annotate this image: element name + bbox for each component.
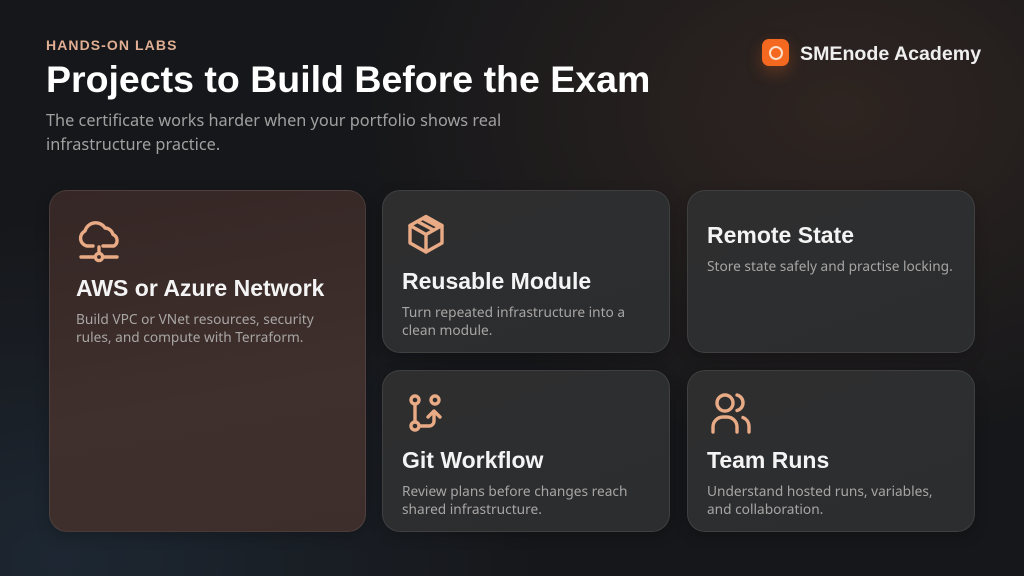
subtitle: The certificate works harder when your portfolio shows real [46, 109, 501, 131]
panel: Team Runs [687, 370, 975, 532]
description: shared infrastructure. [402, 500, 542, 519]
icon: git branch [409, 394, 442, 432]
description [402, 482, 627, 519]
panel: Reusable Module [382, 190, 670, 353]
description [707, 482, 933, 519]
subtitle: infrastructure practice. [46, 133, 220, 155]
panel: Git Workflow [382, 370, 670, 532]
subtitle [46, 109, 501, 155]
description: clean module. [402, 321, 492, 340]
heading: Git Workflow [402, 447, 543, 473]
panel: Remote State [687, 190, 975, 353]
heading: Remote State [707, 222, 854, 248]
icon: box [408, 214, 444, 254]
heading: AWS or Azure Network [76, 275, 324, 301]
panel: AWS or Azure Network [49, 190, 366, 532]
heading: Reusable Module [402, 268, 591, 294]
icon: users [711, 393, 751, 434]
title: Projects to Build Before the Exam [46, 58, 650, 100]
eyebrow: HANDS-ON LABS [46, 37, 177, 53]
icon: cloud network [78, 221, 119, 262]
description: Review plans before changes reach [402, 482, 627, 501]
description [76, 310, 314, 347]
description: and collaboration. [707, 500, 823, 519]
description: rules, and compute with Terraform. [76, 328, 303, 347]
description: Build VPC or VNet resources, security [76, 310, 314, 329]
description: Store state safely and practise locking. [707, 257, 953, 276]
description: Understand hosted runs, variables, [707, 482, 933, 501]
description: Turn repeated infrastructure into a [402, 303, 625, 322]
brand name: SMEnode Academy [800, 42, 981, 64]
brand logo [762, 39, 789, 66]
heading: Team Runs [707, 447, 829, 473]
description [402, 303, 625, 340]
